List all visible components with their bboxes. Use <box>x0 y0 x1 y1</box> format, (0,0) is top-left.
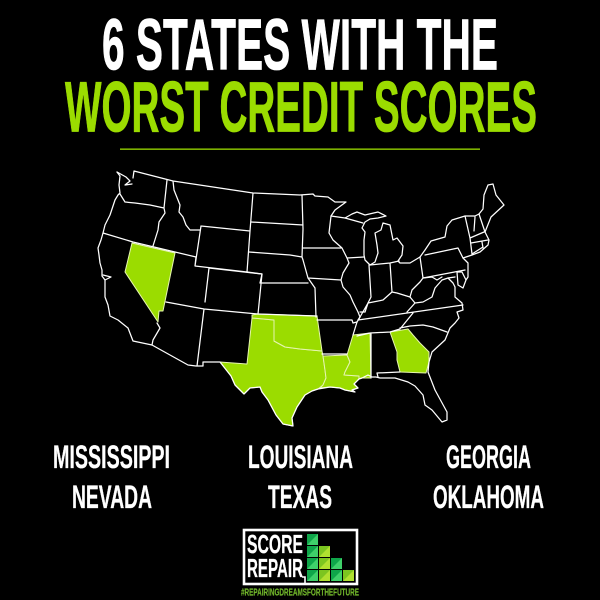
logo bar squares <box>307 534 354 581</box>
logo: Score Repair <box>241 529 359 598</box>
national outline <box>98 171 504 426</box>
state name labels: NEVADA <box>72 479 152 515</box>
logo: Score Repair: REPAIR <box>247 553 303 583</box>
state borders: midwest <box>329 216 410 335</box>
state borders: plains <box>247 195 357 354</box>
state name labels: LOUISIANA <box>248 439 353 475</box>
state borders: south <box>357 303 463 378</box>
hashtag tagline: #REPAIRINGDREAMSFORTHEFUTURE <box>241 588 359 598</box>
highlighted states <box>125 243 429 426</box>
West Virginia and Maryland borders <box>410 257 448 303</box>
state name labels <box>53 439 544 515</box>
state name labels: TEXAS <box>268 479 332 515</box>
state borders: northeast <box>423 214 488 278</box>
San Francisco bay inlet <box>103 275 111 280</box>
map of the United States <box>98 171 504 426</box>
state name labels: MISSISSIPPI <box>53 439 170 475</box>
title <box>65 6 537 148</box>
state borders: northwest <box>103 180 262 366</box>
state name labels: GEORGIA <box>446 439 531 475</box>
logo: Score Repair: SCORE <box>247 529 303 559</box>
